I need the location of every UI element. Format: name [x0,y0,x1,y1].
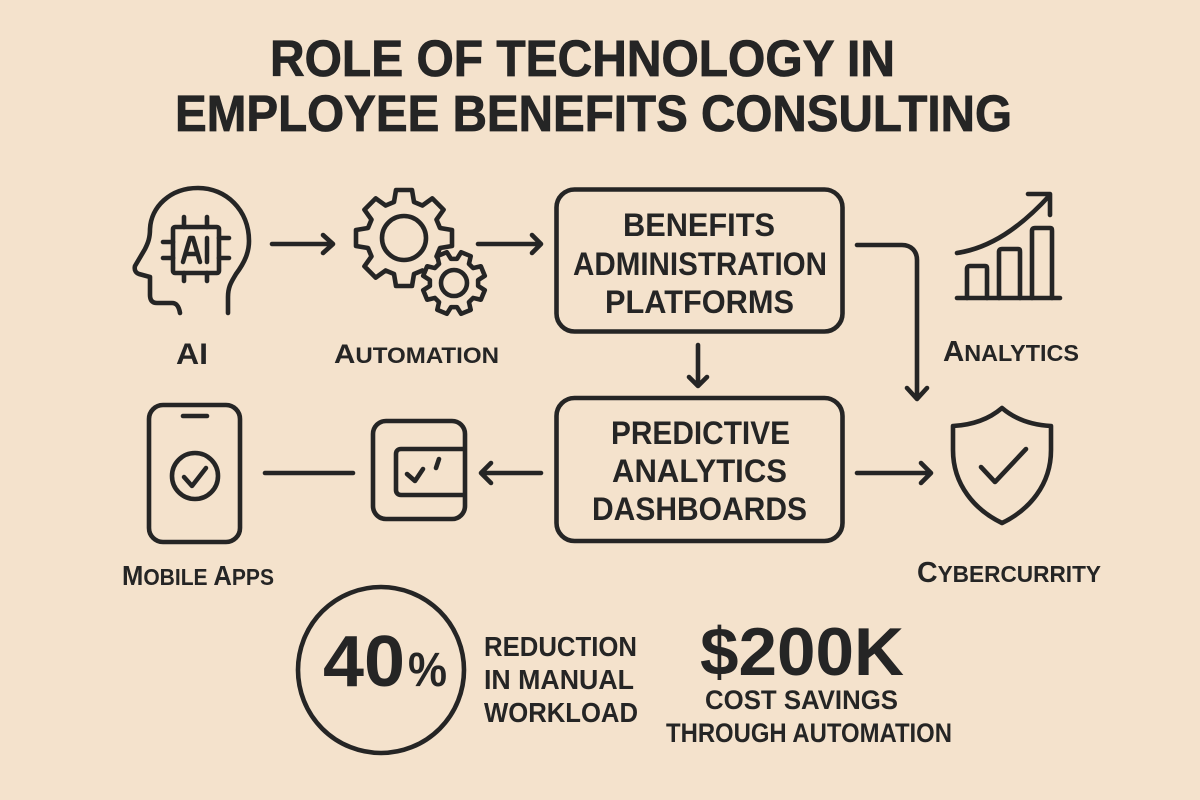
stat: 40 percent badge: % [408,644,447,697]
text: reduction in manual workload: WORKLOAD [484,697,638,728]
arrow: AI to automation [272,235,333,253]
arrow: dashboards to card [481,463,541,483]
icon: dashboard card [373,421,465,519]
text: reduction in manual workload: REDUCTION [484,631,637,662]
panel: predictive analytics dashboards: ANALYTICS [612,453,787,489]
label: Mobile Apps: MOBILE APPS [122,560,274,591]
text: reduction in manual workload: IN MANUAL [484,664,634,695]
icon: mobile phone [149,405,240,542]
panel: benefits administration platforms: BENEFITS [623,207,775,243]
icon: gears [356,190,495,324]
label: Analytics: ANALYTICS [943,336,1079,368]
title: ROLE OF TECHNOLOGY IN [270,30,895,87]
panel: benefits administration platforms [556,190,842,332]
text: reduction in manual workload [484,631,638,728]
arrow: automation to platforms [478,235,541,253]
icon: shield with check [953,408,1051,523]
stat: $200K cost savings: COST SAVINGS [705,685,898,715]
arrow: platforms down to dashboards [689,345,707,386]
arrow: platforms to cybersecurity [857,245,927,399]
title: EMPLOYEE BENEFITS CONSULTING [175,85,1012,142]
label: Automation: AUTOMATION [334,339,499,369]
stat: $200K cost savings [666,614,952,748]
panel: benefits administration platforms: PLATFORMS [605,284,794,320]
panel: predictive analytics dashboards: DASHBOARDS [592,491,807,527]
connector: phone to dashboard card [265,471,353,475]
panel: predictive analytics dashboards [556,398,842,541]
stat: $200K cost savings: $200K [700,614,904,690]
stat: 40 percent badge: 40 [323,622,405,702]
label: Cybercurrity: CYBERCURRITY [917,557,1101,589]
arrow: dashboards to cybersecurity [857,463,931,483]
label: AI: AI [176,338,208,371]
icon: AI head with chip [135,188,249,313]
title [175,30,1012,142]
stat: $200K cost savings: THROUGH AUTOMATION [666,718,952,748]
panel: predictive analytics dashboards: PREDICTIVE [611,415,790,451]
stat: 40 percent badge [298,587,464,753]
panel: benefits administration platforms: ADMINISTRATION [573,246,827,282]
icon: analytics chart [957,194,1060,298]
